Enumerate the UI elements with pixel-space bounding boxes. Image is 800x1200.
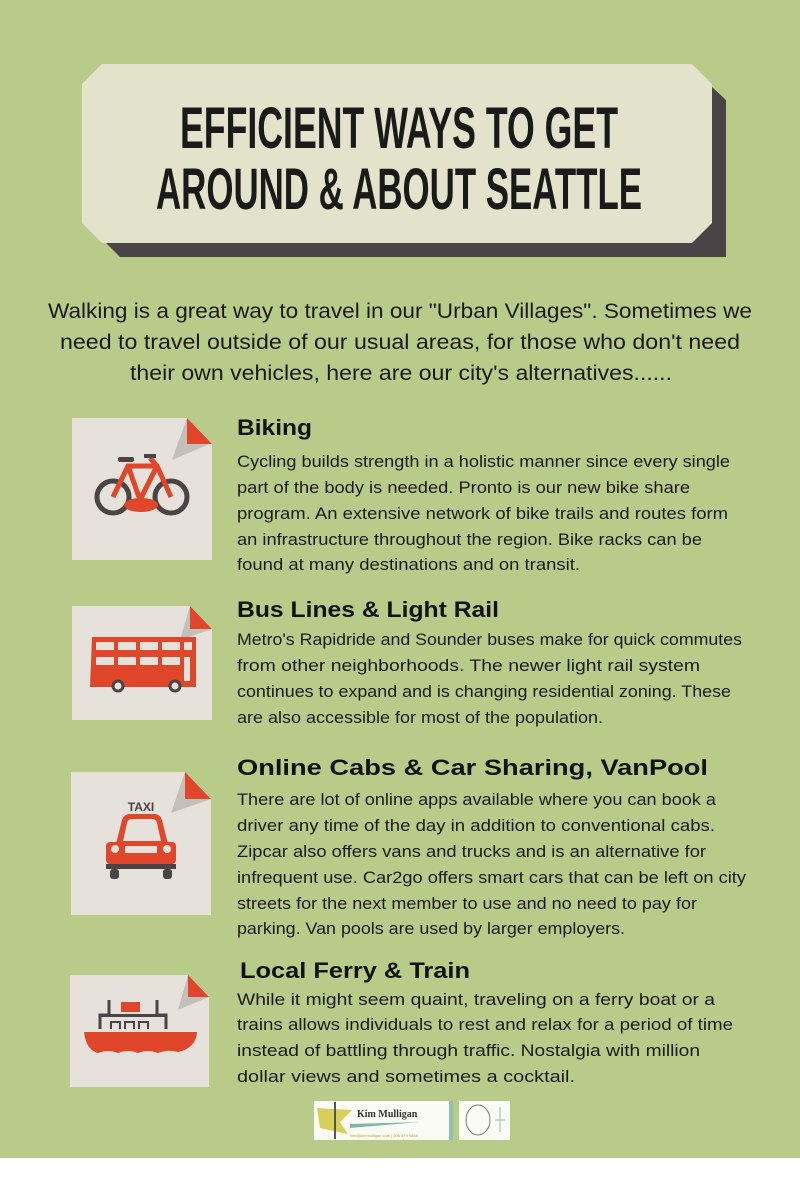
heading: ferry: Local Ferry & Train bbox=[240, 958, 470, 983]
text: biking: program. An extensive network of bike trails and routes form bbox=[237, 504, 728, 523]
text: ferry: instead of battling through traffic. Nostalgia with million bbox=[237, 1041, 700, 1060]
title banner bbox=[82, 64, 726, 257]
text: ferry: dollar views and sometimes a cocktail. bbox=[237, 1067, 575, 1086]
text: ferry: While it might seem quaint, traveling on a ferry boat or a bbox=[237, 990, 716, 1009]
text: bus: are also accessible for most of the population. bbox=[237, 708, 603, 727]
text: cabs: infrequent use. Car2go offers smart cars that can be left on city bbox=[237, 868, 747, 887]
icon: ferry bbox=[84, 1000, 197, 1053]
text: cabs: Zipcar also offers vans and trucks and is an alternative for bbox=[237, 842, 706, 861]
logo: Kim Mulligan: kim@kimmulligan.com | 206 679 9868 bbox=[350, 1133, 419, 1138]
text: bus: Metro's Rapidride and Sounder buses make for quick commutes bbox=[237, 630, 742, 649]
text: bus: continues to expand and is changing residential zoning. These bbox=[237, 682, 731, 701]
icon: double-decker bus bbox=[90, 637, 196, 691]
text: bus bbox=[237, 630, 742, 727]
intro text: Walking is a great way to travel in our "Urban Villages". Sometimes we bbox=[48, 300, 752, 323]
text: cabs: driver any time of the day in addition to conventional cabs. bbox=[237, 816, 715, 835]
intro text: their own vehicles, here are our city's alternatives...... bbox=[130, 362, 672, 385]
text: cabs: streets for the next member to use and no need to pay for bbox=[237, 894, 697, 913]
text: biking: found at many destinations and on transit. bbox=[237, 555, 580, 574]
intro text bbox=[48, 300, 752, 385]
text: biking: part of the body is needed. Pronto is our new bike share bbox=[237, 478, 690, 497]
icon: bicycle bbox=[97, 454, 187, 513]
icon: taxi: TAXI bbox=[128, 800, 154, 814]
heading: cabs: Online Cabs & Car Sharing, VanPool bbox=[237, 755, 708, 780]
card: biking icon bbox=[72, 418, 212, 560]
text: cabs bbox=[237, 790, 747, 938]
logo: Kim Mulligan bbox=[314, 1101, 510, 1140]
text: biking: Cycling builds strength in a holistic manner since every single bbox=[237, 452, 730, 471]
heading: biking: Biking bbox=[237, 415, 312, 440]
text: biking bbox=[237, 452, 730, 574]
text: biking: an infrastructure throughout the region. Bike racks can be bbox=[237, 530, 702, 549]
icon: taxi bbox=[106, 800, 176, 879]
text: bus: from other neighborhoods. The newer light rail system bbox=[237, 656, 700, 675]
card: ferry icon bbox=[70, 975, 209, 1087]
text: cabs: There are lot of online apps available where you can book a bbox=[237, 790, 717, 809]
logo: Kim Mulligan: Kim Mulligan bbox=[357, 1109, 418, 1120]
text: ferry: trains allows individuals to rest and relax for a period of time bbox=[237, 1015, 733, 1034]
card: bus icon bbox=[72, 606, 212, 720]
text: cabs: parking. Van pools are used by larger employers. bbox=[237, 919, 625, 938]
text: ferry bbox=[237, 990, 733, 1086]
card: taxi icon bbox=[71, 772, 211, 915]
heading: bus: Bus Lines & Light Rail bbox=[237, 597, 499, 622]
intro text: need to travel outside of our usual areas, for those who don't need bbox=[60, 331, 740, 354]
title text bbox=[156, 96, 642, 222]
